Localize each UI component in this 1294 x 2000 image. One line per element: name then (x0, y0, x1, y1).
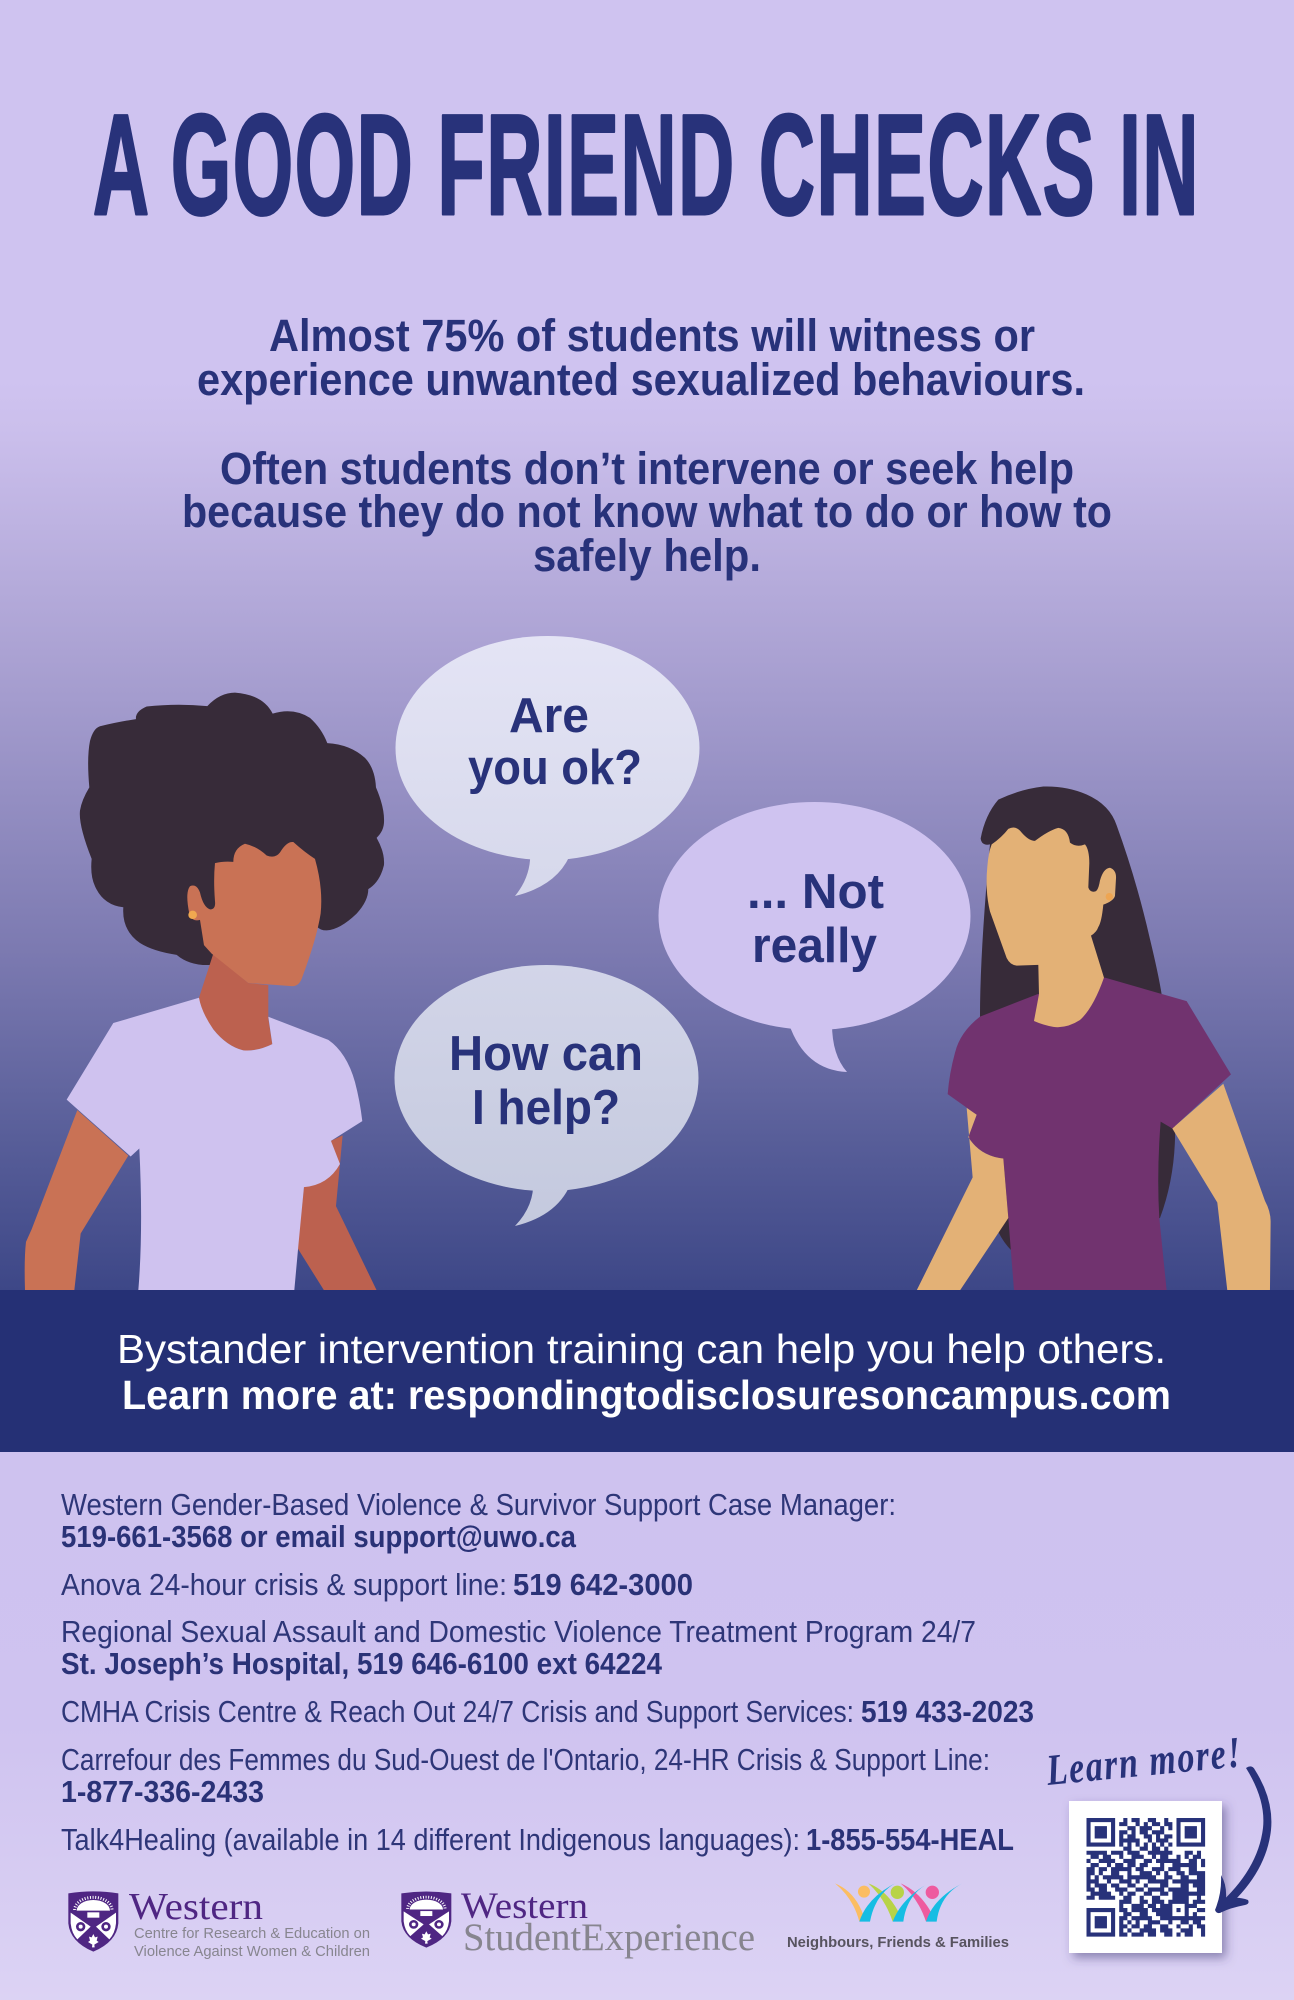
shield icon (68, 1891, 118, 1952)
contact list: St. Joseph’s Hospital, 519 646-6100 ext 64224 (61, 1646, 663, 1681)
contact list: 519-661-3568 or email support@uwo.ca (61, 1519, 577, 1554)
banner: bystander training: Bystander intervention training can help you help others. (117, 1326, 1166, 1372)
contact list: Regional Sexual Assault and Domestic Violence Treatment Program 24/7 (61, 1614, 976, 1649)
left arm (917, 1108, 1008, 1290)
speech bubble: are you ok (396, 636, 700, 896)
intro text (182, 310, 1112, 581)
neck (199, 954, 272, 1051)
logo: Western Student Experience: Western (461, 1886, 588, 1927)
QR code (1069, 1801, 1222, 1953)
intro text: Almost 75% of students will witness or (269, 310, 1035, 361)
contact list: 1-855-554-HEAL (806, 1822, 1014, 1857)
lower background (0, 1452, 1294, 2000)
speech bubble: how can I help (394, 965, 698, 1226)
intro text: safely help. (533, 530, 761, 581)
speech bubble: not really (658, 802, 970, 1072)
contact list: 519 433-2023 (861, 1694, 1034, 1729)
arrow to QR code (1215, 1766, 1271, 1913)
left woman figure (25, 693, 384, 1290)
contact list: Talk4Healing (available in 14 different Indigenous languages): (61, 1822, 800, 1857)
contact list: 519 642-3000 (513, 1567, 693, 1602)
right arm (1172, 1084, 1271, 1290)
white shirt (67, 998, 362, 1290)
face and neck (987, 828, 1116, 1027)
speech bubble: how can I help: I help? (472, 1081, 620, 1135)
shield icon (401, 1892, 451, 1948)
logo: Western Centre for Research: Centre for Research & Education on (134, 1925, 370, 1942)
contact list: Anova 24-hour crisis & support line: (61, 1567, 507, 1602)
background gradient (0, 0, 1294, 1290)
speech bubble: not really: ... Not (747, 865, 884, 919)
purple shirt (948, 978, 1231, 1290)
logo: Western Student Experience (401, 1886, 755, 1959)
intro text: Often students don’t intervene or seek help (220, 443, 1074, 494)
contact list: 1-877-336-2433 (61, 1774, 264, 1809)
contact list: Western Gender-Based Violence & Survivor Support Case Manager: (61, 1487, 896, 1522)
face (187, 842, 321, 986)
afro hair (80, 693, 384, 965)
contact list: Carrefour des Femmes du Sud-Ouest de l'Ontario, 24-HR Crisis & Support Line: (61, 1742, 990, 1777)
long hair (980, 786, 1175, 1251)
contact list (61, 1487, 1034, 1857)
left arm (25, 1110, 128, 1290)
speech bubble: not really: really (752, 919, 877, 973)
logo: Neighbours, Friends & Families (787, 1883, 1009, 1951)
right arm (298, 1135, 377, 1290)
contact list: CMHA Crisis Centre & Reach Out 24/7 Crisis and Support Services: (61, 1694, 854, 1729)
logo: Neighbours, Friends & Families: Neighbours, Friends & Families (787, 1934, 1009, 1951)
logo: Western Student Experience: StudentExperience (463, 1916, 755, 1959)
intro text: experience unwanted sexualized behaviours. (197, 354, 1085, 405)
logo: Western Centre for Research: Violence Against Women & Children (134, 1943, 370, 1960)
speech bubble: are you ok: you ok? (468, 741, 642, 795)
speech bubble: how can I help: How can (449, 1027, 643, 1081)
intro text: because they do not know what to do or how to (182, 486, 1112, 537)
logo: Western Centre for Research (68, 1886, 370, 1960)
handwritten learn more: Learn more! (1043, 1727, 1244, 1795)
logo: Western Centre for Research: Western (129, 1886, 263, 1928)
right woman figure (917, 786, 1271, 1290)
speech bubble: are you ok: Are (509, 689, 589, 743)
earring (1106, 893, 1113, 901)
earring (188, 911, 197, 919)
banner: bystander training: Learn more at: respondingtodisclosuresoncampus.com (122, 1372, 1171, 1418)
swoosh figures (835, 1883, 962, 1922)
banner: bystander training (0, 1290, 1294, 1452)
